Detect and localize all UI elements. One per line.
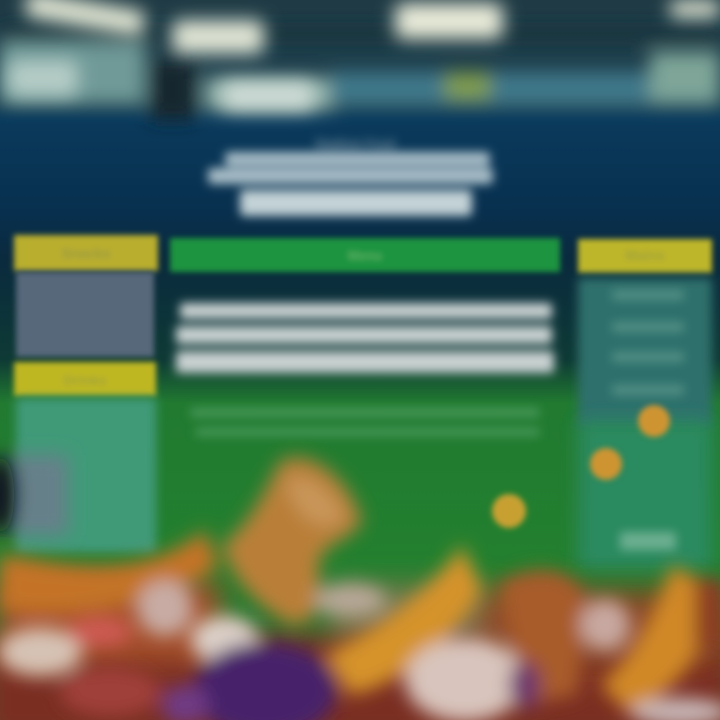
icon: orange dot right top <box>638 405 670 437</box>
left lower header <box>14 362 156 396</box>
fries left <box>0 530 218 614</box>
right header: Mains <box>625 247 665 263</box>
fry centre <box>325 545 482 695</box>
left top header <box>14 235 158 271</box>
centre green banner: Menu <box>348 248 382 263</box>
title <box>208 137 493 216</box>
left lower header: Drinks <box>63 372 107 388</box>
right panel <box>578 278 712 570</box>
chicken right <box>498 570 586 705</box>
fried chicken piece <box>222 457 362 625</box>
centre green caption <box>190 408 540 436</box>
stadium roof and lights <box>0 0 720 120</box>
fries right <box>600 565 715 715</box>
icon: orange dot centre <box>492 494 526 528</box>
centre white text block <box>176 303 554 373</box>
purple onion <box>193 642 337 720</box>
left top header: Snacks <box>61 245 111 261</box>
food foreground <box>0 455 720 720</box>
white food chunks <box>0 628 82 676</box>
title: Stadium Food <box>315 137 395 151</box>
left lower panel <box>8 398 156 553</box>
centre green banner <box>170 238 560 272</box>
icon: orange dot right middle <box>590 448 622 480</box>
dark left edge <box>0 455 14 535</box>
left top panel <box>16 272 154 357</box>
right header <box>578 239 712 273</box>
